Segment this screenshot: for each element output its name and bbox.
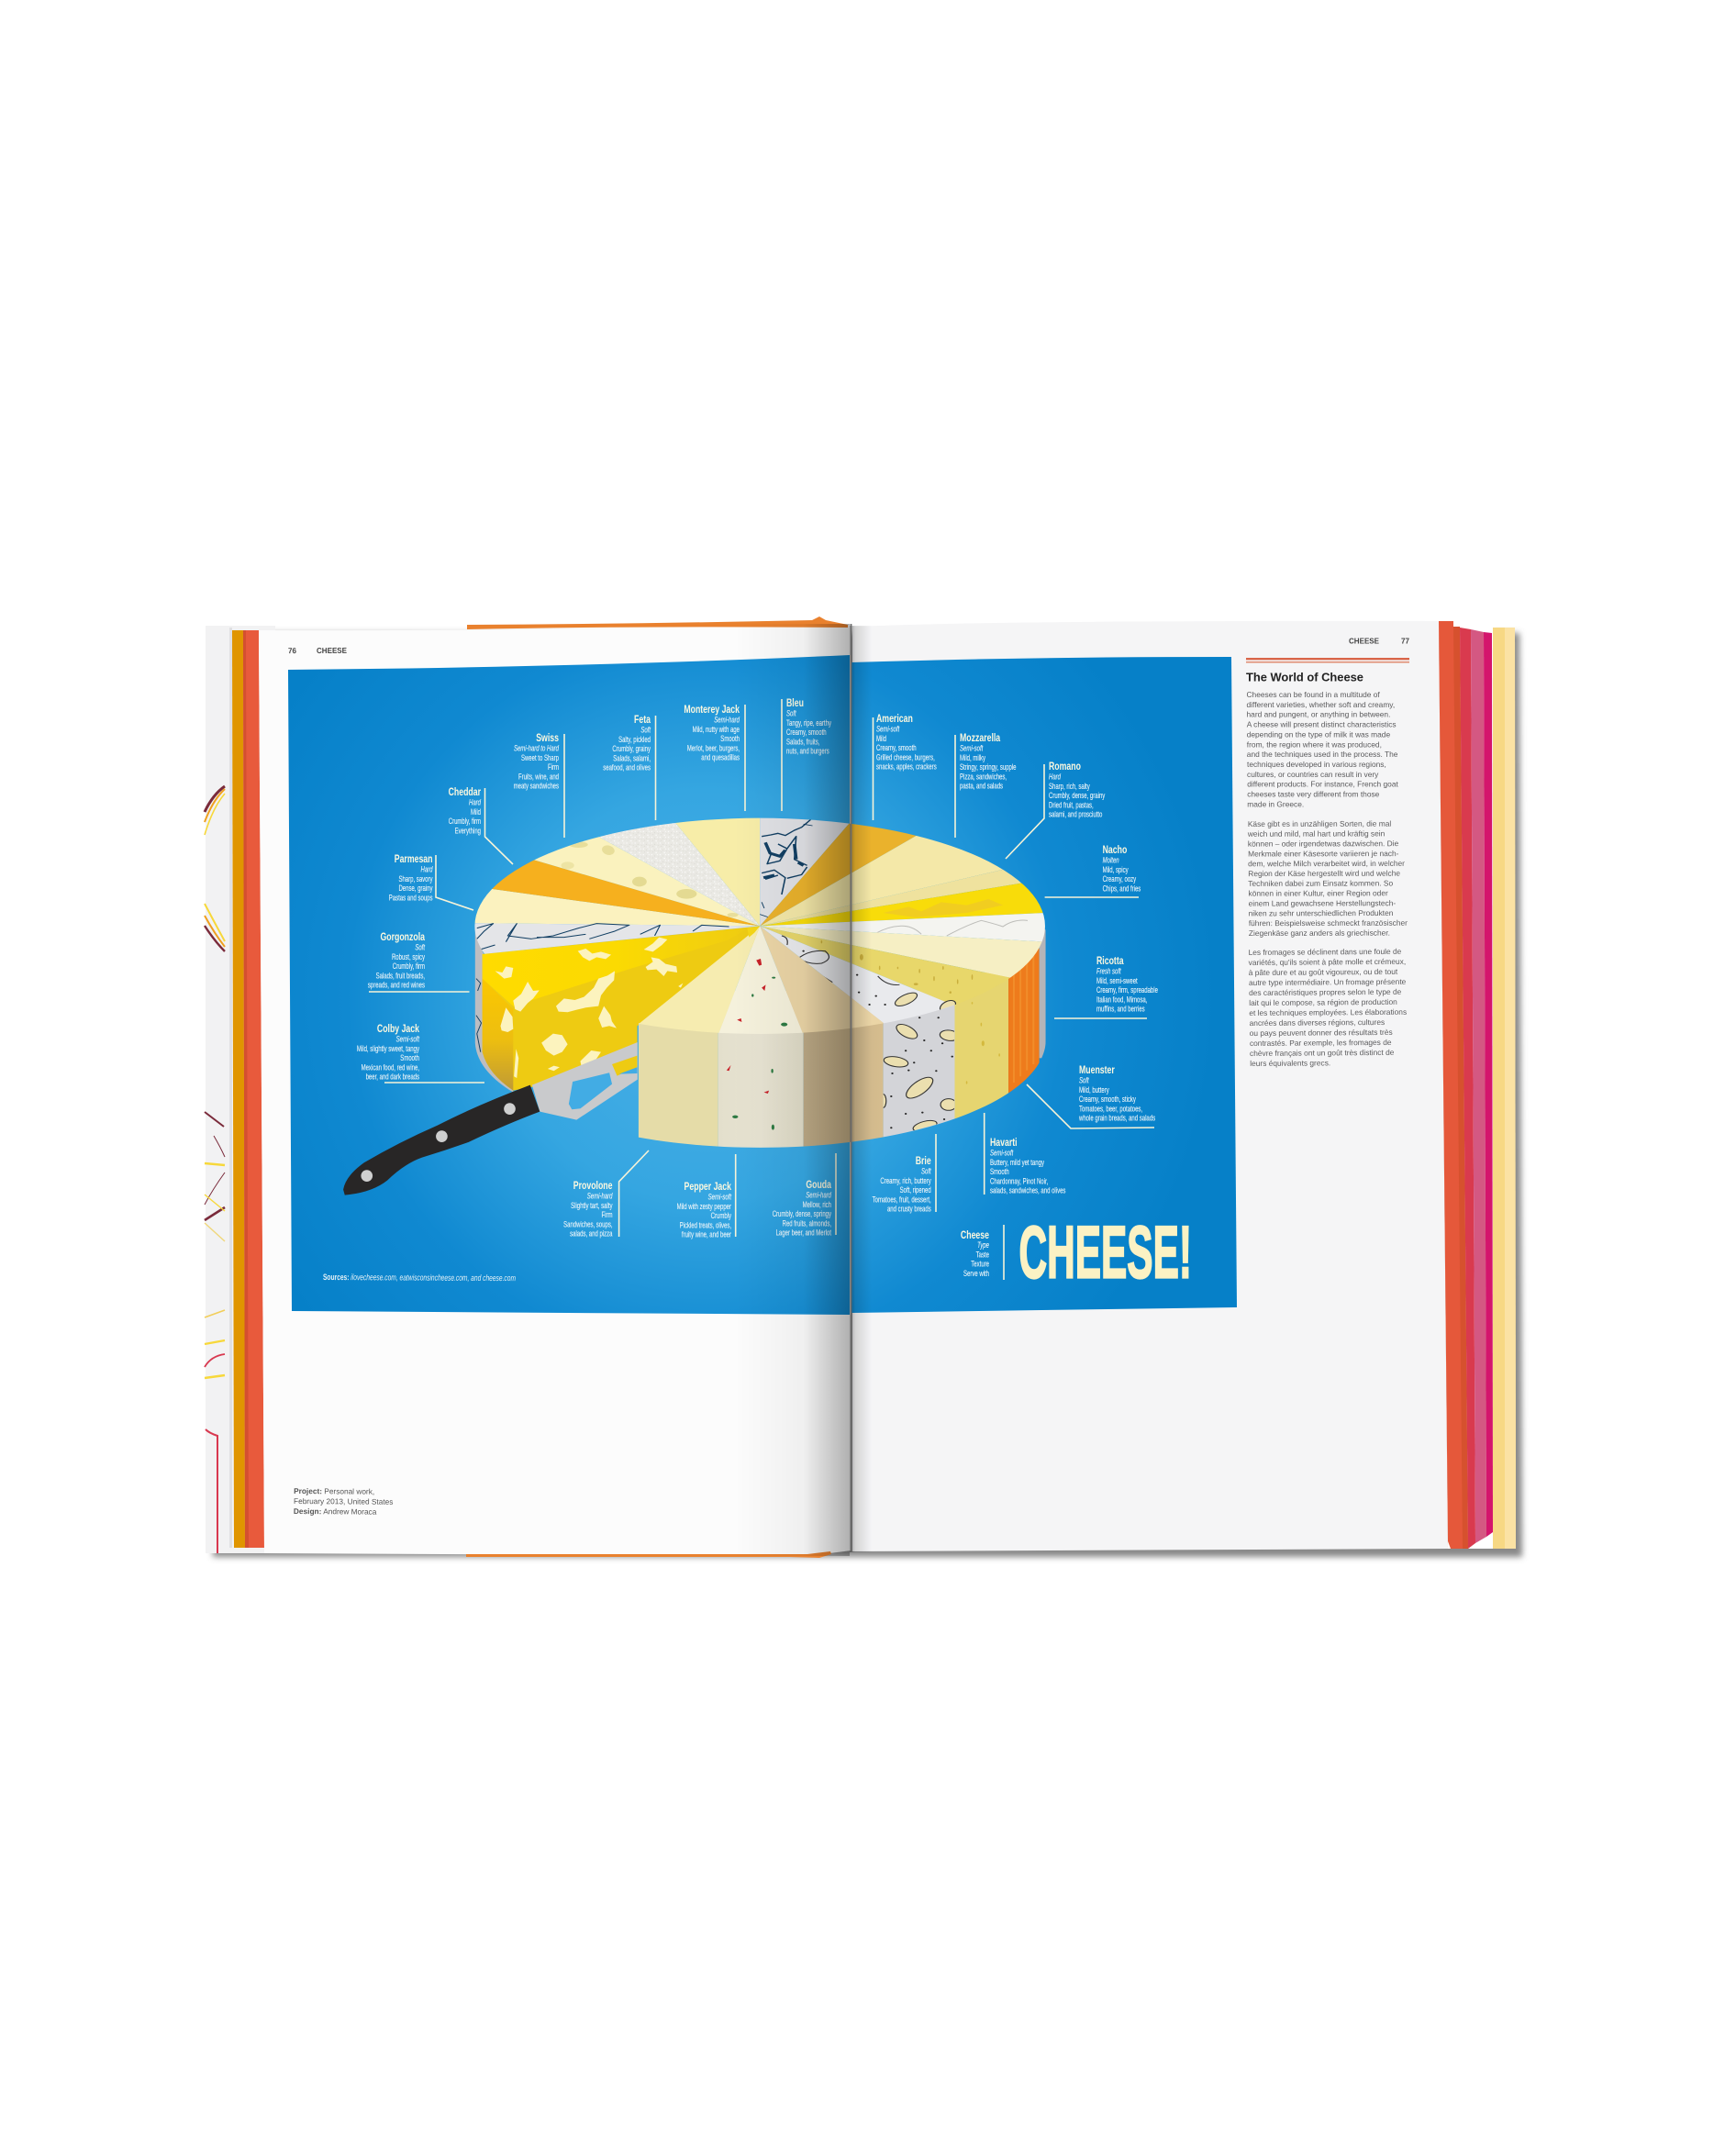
label: Gouda: Lager beer, and Merlot: [776, 1228, 832, 1238]
cheese wheel illustration: [343, 761, 1190, 1195]
article text: English: hard and pungent, or anything in between.: [1246, 710, 1390, 719]
label: Muenster: Tomatoes, beer, potatoes,: [1079, 1104, 1142, 1114]
gutter shading left: [734, 624, 850, 1556]
project credit: Project: Personal work,: [294, 1486, 374, 1496]
article text: English: A cheese will present distinct characteristics: [1247, 720, 1397, 729]
label: Romano: [1006, 761, 1105, 859]
side: brie: [883, 991, 954, 1138]
label: Feta: [603, 715, 655, 820]
label: American: Grilled cheese, burgers,: [876, 752, 935, 762]
label: Pepper Jack: Mild with zesty pepper: [677, 1202, 731, 1211]
article text: French: à pâte dure et au goût vigoureux, ou de tout: [1249, 967, 1398, 977]
article text: English: different varieties, whether soft and creamy,: [1246, 700, 1395, 709]
label: Ricotta: Creamy, firm, spreadable: [1096, 985, 1158, 995]
article text: French: et les techniques employées. Les élaborations: [1249, 1007, 1407, 1017]
label: Parmesan: [389, 854, 473, 910]
label: Swiss: Semi-hard to Hard: [514, 743, 559, 753]
project credit: [294, 1486, 394, 1517]
label: Parmesan: Dense, grainy: [398, 884, 433, 893]
label: Cheddar: Everything: [455, 826, 481, 836]
knife: [343, 1042, 638, 1195]
label: Brie: Brie: [916, 1156, 931, 1167]
label: Nacho: [1045, 845, 1141, 897]
left page header: [288, 646, 347, 655]
project credit: Design: Andrew Moraca: [294, 1506, 377, 1517]
label: Bleu: [782, 698, 831, 811]
label: Monterey Jack: Semi-hard: [714, 715, 740, 725]
article text: French: ancrées dans diverses régions, cultures: [1250, 1017, 1385, 1028]
label: American: snacks, apples, crackers: [876, 761, 937, 772]
slice: swiss: [534, 837, 760, 927]
label: Swiss: Fruits, wine, and: [518, 772, 559, 782]
label: Monterey Jack: Mild, nutty with age: [693, 725, 740, 734]
label: Provolone: Firm: [601, 1210, 613, 1219]
label: Provolone: Sandwiches, soups,: [563, 1219, 613, 1229]
label: Swiss: Sweet to Sharp: [521, 753, 559, 762]
label: Feta: Crumbly, grainy: [612, 744, 651, 753]
legend: Cheese key: Serve with: [963, 1268, 989, 1278]
article text: German: niken zu sehr unterschiedlichen Produkten: [1249, 908, 1394, 917]
left page header: CHEESE: [317, 646, 347, 655]
label: Pepper Jack: Pickled treats, olives,: [680, 1220, 731, 1230]
label: Feta: Salads, salami,: [613, 753, 651, 763]
label: Muenster: whole grain breads, and salads: [1078, 1113, 1155, 1123]
slice: parmesan: [475, 889, 760, 927]
label: Romano: Dried fruit, pastas,: [1049, 800, 1094, 810]
label: Bleu: nuts, and burgers: [786, 746, 829, 756]
label: Mozzarella: Pizza, sandwiches,: [960, 772, 1007, 782]
label: Ricotta: Ricotta: [1096, 956, 1124, 967]
label: Bleu: Creamy, smooth: [786, 728, 827, 737]
label: Feta: Soft: [640, 725, 651, 735]
article text: French: [1249, 947, 1408, 1068]
article text: French: autre type intermédiaire. Un fromage présente: [1249, 977, 1407, 987]
legend: Cheese key: Type: [977, 1240, 989, 1250]
column rules: [1246, 658, 1409, 662]
legend: Cheese key: Texture: [971, 1259, 989, 1269]
article text: English: cheeses taste very different from those: [1247, 789, 1380, 798]
label: Swiss: meaty sandwiches: [514, 781, 559, 791]
label: Provolone: Slightly tart, salty: [571, 1201, 613, 1210]
slice: pepper jack: [719, 927, 802, 1034]
label: Cheddar: Cheddar: [449, 787, 481, 798]
label: Swiss: Firm: [548, 762, 559, 772]
label: Gorgonzola: spreads, and red wines: [368, 980, 425, 990]
label: Gouda: [773, 1153, 836, 1238]
legend: Cheese key: Cheese: [961, 1230, 989, 1241]
label: Romano: Sharp, rich, salty: [1049, 782, 1090, 791]
right page header: CHEESE: [1349, 637, 1379, 646]
right page header: 77: [1401, 637, 1409, 646]
label: Pepper Jack: Crumbly: [711, 1211, 731, 1220]
article text: German: weich und mild, mal hart und kräftig sein: [1247, 828, 1386, 839]
article text: French: lait qui le compose, sa région de production: [1249, 997, 1397, 1007]
label: American: Creamy, smooth: [876, 743, 917, 752]
slice: gorgonzola: [474, 923, 760, 954]
label: Brie: Soft: [921, 1166, 931, 1176]
label: Bleu: Tangy, ripe, earthy: [786, 718, 831, 728]
label: Ricotta: muffins, and berries: [1096, 1004, 1145, 1014]
label: Romano: Romano: [1049, 761, 1081, 772]
slice: feta: [598, 823, 760, 927]
label: Brie: and crusty breads: [887, 1204, 931, 1214]
label: Mozzarella: pasta, and salads: [960, 781, 1003, 791]
slice: romano: [761, 870, 1022, 927]
label: Nacho: Mild, spicy: [1103, 865, 1129, 874]
slice: cream: [760, 926, 1042, 978]
label: Gorgonzola: Soft: [415, 942, 426, 952]
slice: gouda: [760, 927, 885, 1033]
label: Muenster: Soft: [1079, 1075, 1089, 1085]
article text: German: [1247, 819, 1408, 938]
knife blade: [532, 1042, 638, 1120]
label: Parmesan: Pastas and soups: [389, 893, 433, 903]
article text: English: from, the region where it was produced,: [1247, 739, 1382, 749]
article text: English: made in Greece.: [1247, 799, 1304, 808]
label: Muenster: Mild, buttery: [1079, 1085, 1109, 1095]
label: Nacho: Nacho: [1103, 845, 1127, 856]
book spread: [204, 617, 1527, 1561]
article text: German: einem Land gewachsene Herstellungstech-: [1249, 898, 1396, 908]
article text: English: different products. For instance, French goat: [1247, 780, 1399, 789]
label: American: Mild: [876, 734, 886, 743]
label: Mozzarella: Stringy, springy, supple: [960, 762, 1017, 772]
article text: English: and the techniques used in the process. The: [1247, 750, 1398, 759]
label: Nacho: Creamy, oozy: [1103, 874, 1136, 884]
legend: Cheese key: Taste: [976, 1250, 989, 1260]
right page: [852, 621, 1448, 1551]
label: Pepper Jack: Semi-soft: [708, 1192, 732, 1202]
article text: French: leurs équivalents grecs.: [1250, 1058, 1330, 1068]
label: American: American: [876, 714, 913, 725]
label: Colby Jack: [357, 1024, 484, 1083]
article text: English: techniques developed in various regions,: [1247, 760, 1386, 769]
right page header: [1349, 637, 1409, 646]
label: Gorgonzola: Gorgonzola: [380, 932, 425, 943]
label: Romano: salami, and prosciutto: [1049, 809, 1103, 819]
label: Pepper Jack: fruity wine, and beer: [682, 1229, 731, 1239]
slice: havarti: [760, 927, 1010, 1006]
side: muenster orange: [1008, 948, 1040, 1095]
label: Monterey Jack: Merlot, beer, burgers,: [687, 743, 740, 753]
label: Gorgonzola: Robust, spicy: [392, 952, 425, 961]
label: Brie: [873, 1134, 936, 1214]
label: Gouda: Mellow, rich: [803, 1200, 831, 1209]
blue panel left: [288, 655, 850, 1315]
slice: cheddar: [492, 860, 760, 927]
label: Havarti: Semi-soft: [990, 1148, 1014, 1158]
article text: German: Käse gibt es in unzähligen Sorten, die mal: [1248, 819, 1391, 828]
label: Cheddar: Hard: [469, 797, 481, 807]
slice: center tip: [747, 926, 760, 938]
slice: mozzarella: [760, 836, 1004, 927]
slice: bleu: [760, 818, 850, 927]
left cover with swoops: [205, 626, 275, 1553]
colby jack slice: [483, 926, 760, 1091]
label: Muenster: Creamy, smooth, sticky: [1079, 1095, 1136, 1104]
label: Brie: Tomatoes, fruit, dessert,: [873, 1195, 931, 1205]
label: Mozzarella: Mild, milky: [960, 753, 985, 762]
slice: provolone: [639, 927, 760, 1033]
big title CHEESE!: CHEESE!: [1018, 1211, 1192, 1294]
article text: French: Les fromages se déclinent dans une foule de: [1249, 947, 1402, 957]
article text: German: können in einer Kultur, einer Region oder: [1249, 888, 1388, 898]
label: Havarti: Chardonnay, Pinot Noir,: [990, 1176, 1048, 1186]
article text: English: Cheeses can be found in a multitude of: [1246, 690, 1380, 699]
label: Romano: Hard: [1049, 772, 1061, 782]
label: Nacho: Molten: [1103, 855, 1119, 865]
label: Monterey Jack: and quesadillas: [701, 752, 740, 762]
article text: German: Ziegenkäse ganz anders als griechischer.: [1249, 928, 1390, 938]
label: American: Semi-soft: [876, 724, 900, 734]
orange cover strip bottom: [466, 1551, 831, 1558]
slice: monterey jack: [675, 818, 760, 927]
label: Pepper Jack: Pepper Jack: [684, 1182, 731, 1193]
cheese left side rind: [475, 926, 513, 1093]
left page header: 76: [288, 646, 296, 655]
label: Gouda: Red fruits, almonds,: [783, 1218, 831, 1228]
label: Gouda: Crumbly, dense, springy: [773, 1209, 831, 1218]
article text: English: cultures, or countries can result in very: [1247, 770, 1379, 779]
book shadow: [213, 633, 1522, 1557]
label: Gorgonzola: Crumbly, firm: [393, 961, 425, 971]
article text: German: können – oder irgendetwas dazwischen. Die: [1248, 839, 1399, 849]
label: Colby Jack: Colby Jack: [377, 1024, 419, 1035]
label: Colby Jack: Mexican food, red wine,: [362, 1062, 419, 1072]
label: Muenster: Muenster: [1079, 1065, 1115, 1076]
project credit: February 2013, United States: [294, 1496, 393, 1506]
label: Muenster: [1027, 1065, 1155, 1128]
label: Monterey Jack: Monterey Jack: [684, 705, 740, 716]
knife handle: [343, 1085, 540, 1195]
label: Feta: seafood, and olives: [603, 762, 651, 772]
label: Colby Jack: Semi-soft: [396, 1034, 420, 1044]
article text: English: depending on the type of milk it was made: [1247, 729, 1390, 739]
label: Havarti: salads, sandwiches, and olives: [990, 1185, 1065, 1195]
legend: Cheese key: [961, 1225, 1004, 1280]
orange cover strip top: [467, 617, 848, 629]
article title: The World of Cheese: [1246, 671, 1363, 684]
left page edge bands: [232, 630, 264, 1548]
top face slices: [448, 818, 1045, 1034]
side: havarti: [954, 972, 1008, 1119]
label: Colby Jack: Smooth: [400, 1053, 419, 1062]
label: Cheddar: [449, 787, 513, 864]
side: pepper jack: [718, 991, 804, 1153]
label: Havarti: [985, 1113, 1065, 1195]
article text: German: Techniken dabei zum Einsatz kommen. So: [1248, 878, 1393, 888]
label: Gouda: Semi-hard: [806, 1190, 831, 1200]
label: Parmesan: Parmesan: [395, 854, 433, 865]
gutter line: [850, 624, 851, 1551]
left page: [259, 624, 851, 1556]
label: Provolone: [563, 1150, 649, 1239]
label: Brie: Creamy, rich, buttery: [880, 1176, 931, 1185]
label: Mozzarella: Mozzarella: [960, 733, 1000, 744]
side: provolone: [639, 1023, 718, 1150]
label: Parmesan: Sharp, savory: [398, 874, 433, 884]
label: Feta: Feta: [634, 715, 651, 726]
article text: German: führen: Beispielsweise schmeckt französischer: [1249, 918, 1408, 928]
article text: French: ou pays peuvent donner des résultats très: [1250, 1028, 1393, 1038]
label: Nacho: Chips, and fries: [1103, 884, 1141, 894]
article text: English: [1246, 690, 1399, 808]
label: Ricotta: [1054, 956, 1158, 1018]
label: Gorgonzola: [368, 932, 470, 992]
label: Pepper Jack: [677, 1154, 736, 1239]
slice: american: [760, 824, 916, 927]
label: Parmesan: Hard: [420, 864, 433, 874]
label: Mozzarella: [955, 733, 1017, 838]
gutter shading right: [850, 626, 872, 1552]
label: Havarti: Smooth: [990, 1167, 1009, 1176]
slice: white: [761, 913, 1045, 941]
label: Gorgonzola: Salads, fruit breads,: [376, 971, 425, 981]
label: Monterey Jack: [684, 705, 745, 811]
label: Gouda: Gouda: [806, 1180, 831, 1191]
label: Cheddar: Crumbly, firm: [449, 817, 481, 826]
label: Swiss: [514, 733, 564, 838]
label: Cheddar: Mild: [471, 807, 481, 817]
label: Mozzarella: Semi-soft: [960, 743, 984, 753]
article text: German: Region der Käse hergestellt wird und welche: [1248, 869, 1400, 878]
slice: brie: [760, 927, 956, 1024]
label: Romano: Crumbly, dense, grainy: [1049, 791, 1105, 800]
label: Ricotta: Mild, semi-sweet: [1096, 976, 1138, 985]
label: Colby Jack: Mild, slightly sweet, tangy: [357, 1044, 419, 1053]
article text: French: des caractéristiques propres selon le type de: [1249, 987, 1402, 997]
sources: Sources: ilovecheese.com, eatwisconsincheese.com, and cheese.com: [323, 1272, 516, 1283]
slice: nacho: [760, 883, 1043, 927]
article text: German: dem, welche Milch verarbeitet wird, in welcher: [1248, 859, 1405, 868]
label: Provolone: Semi-hard: [587, 1191, 613, 1201]
label: American: [874, 714, 937, 820]
article text: French: variétés, qu'ils soient à pâte molle et crémeux,: [1249, 957, 1406, 967]
label: Bleu: Bleu: [786, 698, 804, 709]
article text: French: chèvre français ont un goût très distinct de: [1250, 1048, 1395, 1058]
article text: German: Merkmale einer Käsesorte variieren je nach-: [1248, 849, 1399, 858]
side: grey rind: [1040, 929, 1046, 1058]
label: Bleu: Soft: [786, 708, 796, 718]
right page edge bands: [1439, 621, 1516, 1549]
label: Monterey Jack: Smooth: [720, 734, 740, 743]
label: Havarti: Havarti: [990, 1138, 1018, 1149]
label: Brie: Soft, ripened: [900, 1185, 931, 1195]
label: Feta: Salty, pickled: [618, 735, 651, 744]
label: Swiss: Swiss: [536, 733, 559, 744]
label: Provolone: salads, and pizza: [570, 1228, 613, 1239]
label: Bleu: Salads, fruits,: [786, 737, 819, 747]
side: gouda: [804, 991, 884, 1150]
label: Ricotta: Italian food, Mimosa,: [1096, 995, 1147, 1005]
label: Colby Jack: beer, and dark breads: [366, 1072, 419, 1082]
label: Provolone: Provolone: [573, 1181, 613, 1192]
label: Havarti: Buttery, mild yet tangy: [990, 1158, 1044, 1167]
label: Ricotta: Fresh soft: [1096, 966, 1121, 976]
blue panel right: [851, 657, 1237, 1313]
article text: French: contrastés. Par exemple, les fromages de: [1250, 1038, 1392, 1048]
side faces: [639, 929, 1046, 1153]
